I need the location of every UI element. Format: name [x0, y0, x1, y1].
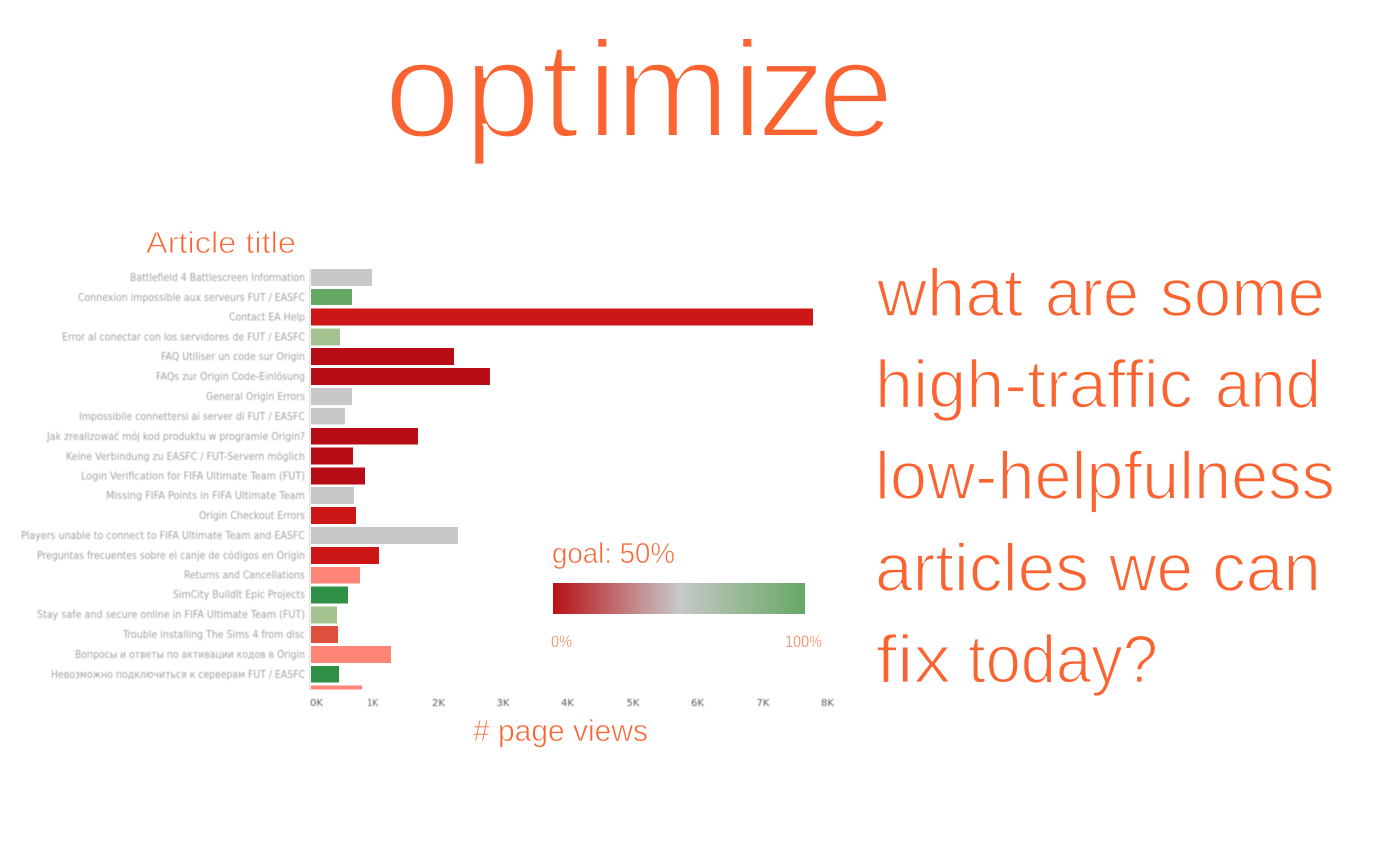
- axis label: page views: # page views: [473, 713, 648, 748]
- axis baseline: [309, 269, 310, 690]
- question text: some: [1160, 255, 1325, 331]
- x axis tick labels: 3K: [496, 698, 510, 709]
- article labels: Невозможно подключиться к серверам FUT / EASFC: [51, 670, 305, 681]
- question text: high-traffic: [875, 346, 1193, 422]
- article labels: Players unable to connect to FIFA Ultimate Team and EASFC: [21, 531, 305, 542]
- article labels: Вопросы и ответы по активации кодов в Origin: [75, 650, 305, 661]
- article labels: Battlefield 4 Battlescreen Information: [130, 273, 305, 284]
- article labels: [21, 273, 305, 681]
- article labels: Keine Verbindung zu EASFC / FUT-Servern möglich: [66, 452, 305, 463]
- article labels: Error al conectar con los servidores de FUT / EASFC: [62, 332, 305, 344]
- article labels: Preguntas frecuentes sobre el canje de códigos en Origin: [37, 550, 305, 562]
- article labels: General Origin Errors: [206, 392, 305, 403]
- x axis tick labels: 2K: [432, 698, 445, 709]
- article labels: Jak zrealizować mój kod produktu w programie Origin?: [46, 431, 305, 443]
- article labels: Missing FIFA Points in FIFA Ultimate Team: [106, 491, 305, 502]
- x axis tick labels: 1K: [367, 698, 378, 709]
- question text: low-helpfulness: [875, 438, 1335, 514]
- article labels: Connexion impossible aux serveurs FUT / EASFC: [78, 293, 305, 304]
- question text: articles: [875, 530, 1089, 606]
- question text: are: [1045, 255, 1139, 331]
- x axis tick labels: [310, 698, 834, 709]
- bar chart: page views by article: [21, 269, 834, 709]
- x axis tick labels: 8K: [821, 698, 834, 709]
- legend min label: 0%: [551, 632, 572, 651]
- bars: [311, 269, 813, 690]
- x axis tick labels: 4K: [561, 698, 574, 709]
- legend: helpfulness goal: [551, 538, 822, 651]
- x axis tick labels: 5K: [626, 698, 640, 709]
- article labels: Stay safe and secure online in FIFA Ultimate Team (FUT): [37, 610, 305, 621]
- article labels: Impossibile connettersi ai server di FUT / EASFC: [79, 412, 305, 423]
- question text: what: [876, 255, 1023, 331]
- title: optimize: [384, 13, 894, 167]
- question text: can: [1212, 530, 1321, 606]
- x axis tick labels: 6K: [691, 698, 704, 709]
- question text: and: [1215, 346, 1321, 422]
- x axis tick labels: 0K: [310, 698, 323, 709]
- heading: article title axis: Article title: [146, 225, 296, 260]
- legend max label: 100%: [785, 632, 822, 651]
- legend gradient bar: [553, 583, 805, 614]
- article labels: SimCity BuildIt Epic Projects: [173, 590, 305, 601]
- legend title: goal: 50%: [552, 538, 675, 570]
- article labels: Origin Checkout Errors: [199, 511, 305, 522]
- x axis tick labels: 7K: [756, 698, 770, 709]
- question text: fix: [876, 622, 951, 698]
- article labels: Login Verification for FIFA Ultimate Team (FUT): [81, 472, 305, 482]
- article labels: Contact EA Help: [229, 312, 305, 324]
- article labels: Trouble installing The Sims 4 from disc: [122, 630, 305, 641]
- article labels: Returns and Cancellations: [184, 570, 305, 582]
- question text: today?: [968, 622, 1158, 698]
- question text: [875, 255, 1335, 698]
- article labels: FAQs zur Origin Code-Einlösung: [156, 372, 305, 383]
- article labels: FAQ Utiliser un code sur Origin: [161, 352, 305, 363]
- question text: we: [1108, 530, 1193, 606]
